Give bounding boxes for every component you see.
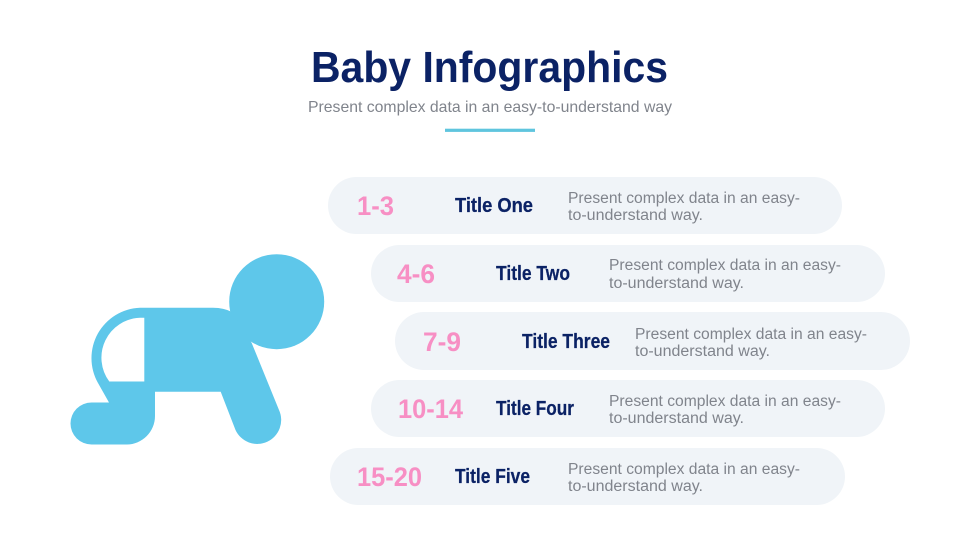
row 3: Title Three — [522, 331, 610, 353]
row 3 — [395, 312, 910, 370]
title: Baby Infographics — [311, 43, 668, 92]
subtitle: Present complex data in an easy-to-understand way — [308, 99, 672, 116]
row 5: to-understand way. — [568, 478, 703, 495]
row 1: to-understand way. — [568, 207, 703, 224]
row 2: 4-6 — [397, 259, 435, 289]
row 1: 1-3 — [357, 191, 394, 221]
row 2 — [371, 245, 885, 302]
row 2: to-understand way. — [609, 275, 744, 292]
row 4: 10-14 — [398, 394, 463, 424]
row 3: to-understand way. — [635, 343, 770, 360]
row 1: Present complex data in an easy- — [568, 190, 800, 207]
row 3: 7-9 — [423, 327, 461, 357]
icon: crawling baby — [70, 254, 324, 444]
row 4: Present complex data in an easy- — [609, 393, 841, 410]
row 3: Present complex data in an easy- — [635, 326, 867, 343]
row 2: Title Two — [496, 263, 570, 285]
row 4: Title Four — [496, 398, 574, 420]
title underline — [445, 129, 535, 132]
row 1 — [328, 177, 842, 234]
row 5: Title Five — [455, 466, 530, 488]
row 5: 15-20 — [357, 462, 422, 492]
row 1: Title One — [455, 195, 533, 217]
row 5 — [330, 448, 845, 505]
row 4: to-understand way. — [609, 410, 744, 427]
row 4 — [371, 380, 885, 437]
row 2: Present complex data in an easy- — [609, 257, 841, 274]
row 5: Present complex data in an easy- — [568, 461, 800, 478]
